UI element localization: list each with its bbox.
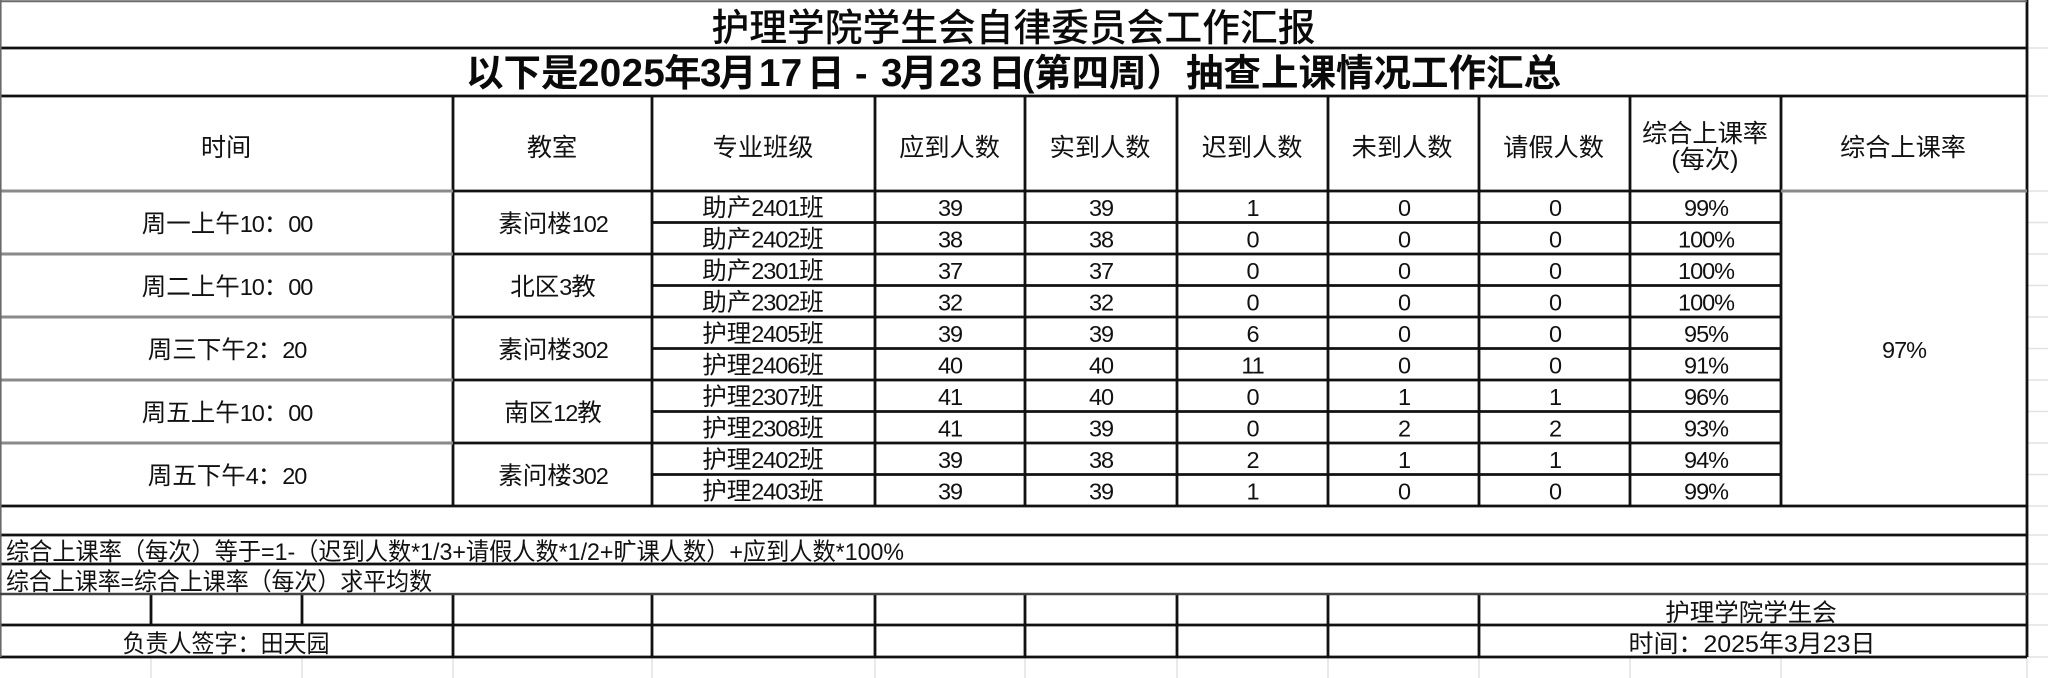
data rows: 38 (1089, 447, 1114, 473)
subtitle: 2025 (578, 52, 665, 95)
subtitle: 3 (881, 52, 903, 95)
data rows: 38 (1089, 226, 1114, 252)
data rows: 0 (1398, 195, 1411, 221)
subtitle: 17 (759, 52, 803, 95)
data rows: 40 (1089, 384, 1114, 410)
data rows: 94% (1684, 447, 1729, 473)
table header row: 专业班级 (713, 134, 813, 162)
data rows: 0 (1246, 384, 1259, 410)
data rows: 38 (938, 226, 963, 252)
data rows: 41 (938, 416, 962, 442)
data rows: 39 (938, 478, 962, 504)
table header row: 未到人数 (1352, 134, 1452, 162)
data rows: 0 (1398, 290, 1411, 316)
data rows (702, 194, 1735, 506)
data rows: 32 (938, 290, 962, 316)
data rows: 1 (1246, 478, 1259, 504)
data rows: 2 (1398, 416, 1410, 442)
subtitle: - (855, 52, 868, 94)
data rows: 0 (1246, 416, 1259, 442)
time and classroom column: 素问楼302 (498, 336, 608, 364)
organisation name: 护理学院学生会 (1665, 599, 1837, 627)
data rows: 护理2307班 (702, 383, 824, 411)
data rows: 40 (1089, 352, 1114, 378)
data rows: 护理2406班 (702, 352, 824, 380)
data rows: 11 (1241, 352, 1264, 378)
subtitle: ( (1022, 52, 1035, 94)
data rows: 0 (1549, 226, 1562, 252)
data rows: 99% (1684, 195, 1729, 221)
data rows: 37 (938, 258, 962, 284)
data rows: 1 (1246, 195, 1259, 221)
data rows: 0 (1549, 195, 1562, 221)
data rows: 100% (1678, 258, 1735, 284)
data rows: 95% (1684, 321, 1729, 347)
table header row: (每次) (1671, 146, 1739, 174)
data rows: 0 (1246, 258, 1259, 284)
data rows: 96% (1684, 384, 1729, 410)
data rows: 37 (1089, 258, 1113, 284)
data rows: 99% (1684, 478, 1729, 504)
subtitle: 3 (700, 52, 722, 95)
data rows: 91% (1684, 352, 1729, 378)
subtitle: 抽查上课情况工作汇总 (1186, 52, 1561, 94)
data rows: 41 (938, 384, 962, 410)
time and classroom column: 北区3教 (510, 273, 596, 301)
time and classroom column: 素问楼102 (498, 210, 608, 238)
table header row: 教室 (527, 134, 577, 162)
subtitle: 日 (988, 52, 1026, 94)
subtitle: 月 (900, 52, 938, 94)
data rows: 0 (1246, 226, 1259, 252)
time and classroom column: 周一上午10：00 (142, 210, 313, 238)
data rows: 0 (1398, 226, 1411, 252)
data rows: 2 (1549, 416, 1561, 442)
formula note: overall attendance: 综合上课率=综合上课率（每次）求平均数 (6, 568, 432, 596)
data rows: 39 (1089, 321, 1113, 347)
data rows: 93% (1684, 416, 1729, 442)
table header row: 综合上课率 (1840, 134, 1966, 162)
data rows: 0 (1549, 321, 1562, 347)
table header row: 迟到人数 (1202, 134, 1302, 162)
data rows: 1 (1549, 447, 1561, 473)
data rows: 100% (1678, 226, 1735, 252)
subtitle: 月 (719, 52, 756, 94)
data rows: 39 (938, 195, 962, 221)
data rows: 0 (1398, 258, 1411, 284)
table header row (201, 120, 1966, 174)
data rows: 护理2402班 (702, 446, 824, 474)
subtitle: 以下是 (466, 52, 578, 94)
data rows: 1 (1398, 384, 1410, 410)
table header row: 请假人数 (1503, 134, 1604, 162)
table header row: 综合上课率 (1642, 120, 1768, 148)
subtitle: 23 (939, 52, 983, 95)
data rows: 32 (1089, 290, 1113, 316)
data rows: 助产2301班 (702, 257, 824, 285)
data rows: 0 (1398, 478, 1411, 504)
time and classroom column (142, 210, 608, 490)
overall attendance rate: 97% (1882, 337, 1927, 363)
data rows: 39 (1089, 478, 1113, 504)
formula note: attendance per session: 综合上课率（每次）等于=1-（迟到人数*1/3+请假人数*1/2+旷课人数）+应到人数*100% (6, 538, 904, 566)
time and classroom column: 周五下午4：20 (148, 462, 307, 490)
data rows: 护理2403班 (702, 478, 824, 506)
data rows: 39 (938, 321, 962, 347)
data rows: 助产2402班 (702, 226, 824, 254)
data rows: 助产2302班 (702, 288, 824, 316)
data rows: 100% (1678, 290, 1735, 316)
subtitle: 年 (664, 52, 702, 94)
signature: 负责人签字：田天园 (122, 630, 330, 658)
time and classroom column: 周五上午10：00 (142, 399, 313, 427)
subtitle: 第四周） (1034, 52, 1184, 94)
time and classroom column: 周二上午10：00 (142, 273, 313, 301)
data rows: 0 (1398, 321, 1411, 347)
report date: 时间：2025年3月23日 (1628, 630, 1876, 658)
data rows: 0 (1549, 290, 1562, 316)
table header row: 时间 (201, 134, 251, 162)
data rows: 0 (1398, 352, 1411, 378)
data rows: 0 (1549, 258, 1562, 284)
table header row: 应到人数 (899, 134, 1000, 162)
data rows: 护理2405班 (702, 320, 824, 348)
subtitle: 日 (807, 52, 844, 94)
data rows: 6 (1246, 321, 1259, 347)
data rows: 39 (938, 447, 962, 473)
time and classroom column: 南区12教 (504, 399, 602, 427)
data rows: 0 (1549, 352, 1562, 378)
table header row: 实到人数 (1050, 134, 1150, 162)
data rows: 1 (1398, 447, 1410, 473)
time and classroom column: 素问楼302 (498, 462, 608, 490)
data rows: 护理2308班 (702, 414, 824, 442)
data rows: 1 (1549, 384, 1561, 410)
data rows: 0 (1549, 478, 1562, 504)
data rows: 40 (938, 352, 963, 378)
data rows: 助产2401班 (702, 194, 824, 222)
data rows: 39 (1089, 195, 1113, 221)
data rows: 2 (1246, 447, 1259, 473)
time and classroom column: 周三下午2：20 (148, 336, 307, 364)
title: 护理学院学生会自律委员会工作汇报 (712, 8, 1316, 50)
data rows: 0 (1246, 290, 1259, 316)
data rows: 39 (1089, 416, 1113, 442)
